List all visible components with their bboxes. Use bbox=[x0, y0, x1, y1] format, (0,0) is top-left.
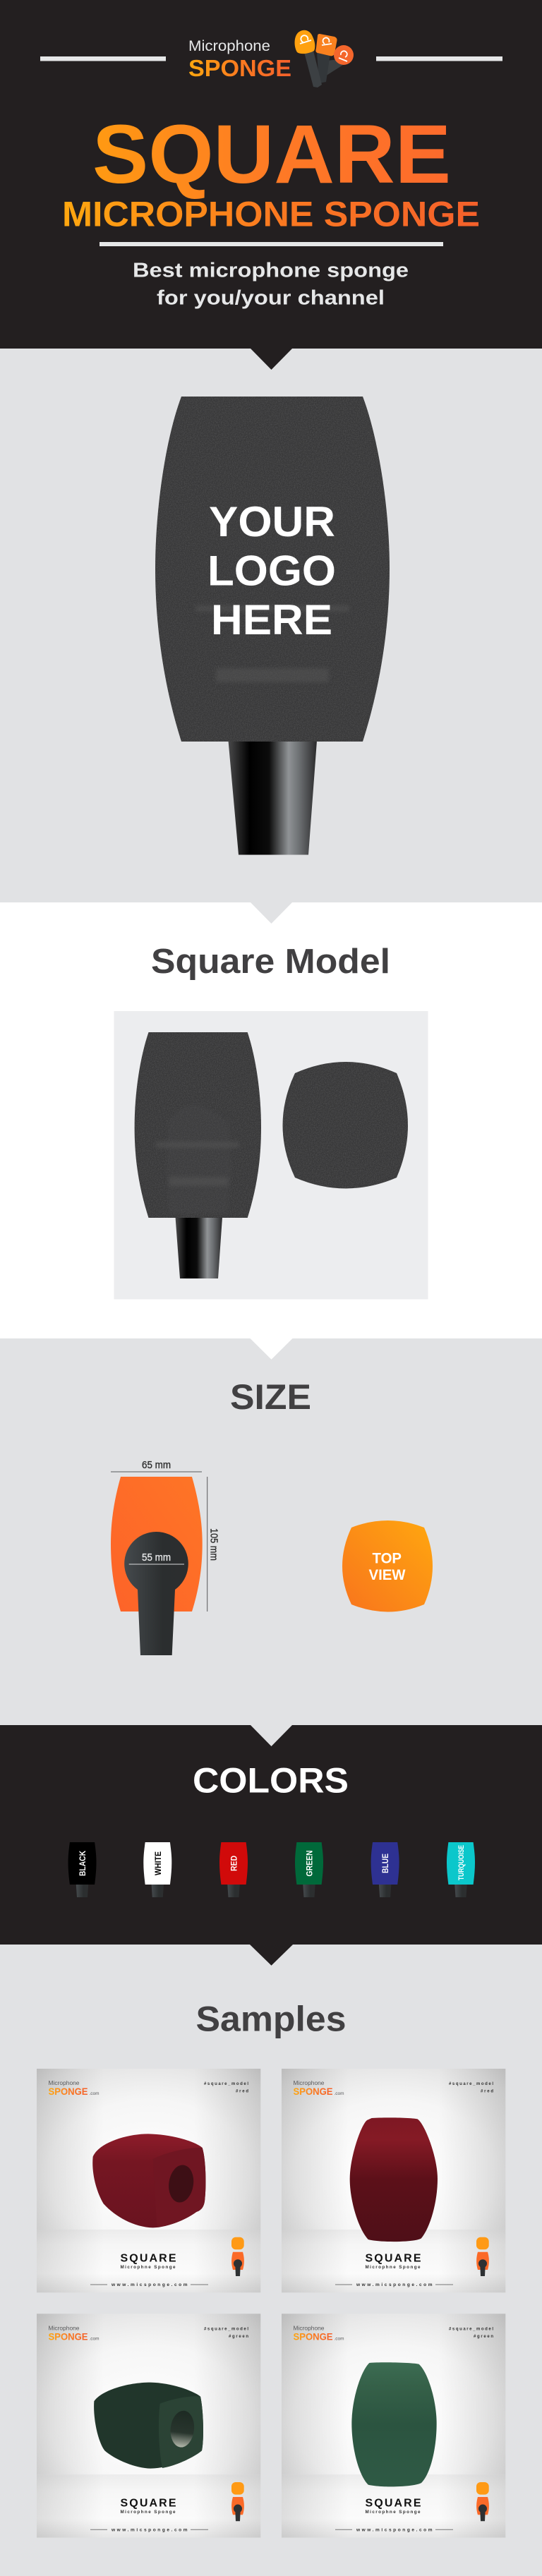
arrow: colors notch bbox=[250, 1945, 293, 1966]
swatch: red: RED bbox=[229, 1856, 239, 1871]
mini icon bbox=[476, 2482, 489, 2521]
tagline line one: Best microphone sponge bbox=[133, 260, 409, 282]
card subtitle: Microphne Sponge bbox=[366, 2265, 421, 2270]
mini icon bbox=[231, 2237, 244, 2276]
YOUR: YOUR bbox=[209, 498, 335, 545]
swatch: white bbox=[143, 1842, 171, 1897]
product photo: red sponge angled bbox=[92, 2134, 205, 2227]
hashtags: #red bbox=[236, 2090, 248, 2094]
hashtags bbox=[204, 2082, 248, 2094]
hashtags: #square_model bbox=[449, 2327, 493, 2331]
arrow: section notch bbox=[250, 1338, 293, 1360]
product photo: green sponge angled bbox=[94, 2383, 203, 2469]
sponge faint band upper bbox=[195, 605, 349, 612]
logo word SPONGE: SPONGE bbox=[188, 55, 291, 81]
heading SIZE: SIZE bbox=[230, 1377, 311, 1417]
swatch: green: GREEN bbox=[305, 1850, 315, 1877]
band lower bbox=[169, 1177, 229, 1186]
top view sponge bbox=[282, 1062, 408, 1188]
hashtags bbox=[449, 2082, 493, 2094]
card logo: Microphone bbox=[48, 2079, 80, 2086]
card logo: SPONGE bbox=[294, 2086, 333, 2097]
sponge side view bbox=[135, 1032, 261, 1218]
hashtags bbox=[449, 2327, 493, 2339]
card logo: .com bbox=[335, 2336, 344, 2341]
swatch: turquoise: TURQUOISE bbox=[457, 1845, 466, 1880]
card website: www.micsponge.com bbox=[111, 2527, 188, 2532]
swatch: red bbox=[219, 1842, 248, 1897]
arrow: section notch bbox=[251, 902, 292, 924]
sponge body bbox=[155, 397, 390, 742]
microphone handle bbox=[229, 741, 317, 855]
mini icon bbox=[231, 2482, 244, 2521]
card title: SQUARE bbox=[120, 2498, 176, 2510]
card title: SQUARE bbox=[366, 2498, 421, 2510]
tagline bbox=[133, 260, 409, 309]
card logo: Microphone bbox=[48, 2324, 80, 2331]
arrow: section notch bbox=[251, 1725, 292, 1746]
card logo: SPONGE bbox=[294, 2330, 333, 2342]
card logo: .com bbox=[335, 2091, 344, 2096]
panel: hero product bbox=[155, 397, 390, 855]
panel: square model bbox=[0, 902, 542, 1338]
HERE: HERE bbox=[211, 596, 332, 643]
card logo bbox=[48, 2079, 99, 2097]
title SQUARE: SQUARE bbox=[92, 108, 451, 201]
band upper bbox=[156, 1142, 239, 1148]
logo placeholder text bbox=[207, 498, 336, 643]
card logo bbox=[48, 2324, 99, 2342]
sponge faint band lower bbox=[216, 668, 329, 682]
card logo: .com bbox=[89, 2336, 99, 2341]
width arrow bbox=[111, 1471, 202, 1473]
swatch: blue bbox=[371, 1842, 399, 1897]
size diagram bbox=[111, 1460, 219, 1655]
LOGO: LOGO bbox=[207, 548, 336, 594]
card logo: .com bbox=[89, 2091, 99, 2096]
heading Square Model: Square Model bbox=[151, 942, 390, 981]
handle bbox=[175, 1217, 222, 1278]
height label: 105 mm bbox=[207, 1528, 219, 1561]
swatch: black: BLACK bbox=[78, 1851, 88, 1876]
swatch: turquoise bbox=[447, 1842, 475, 1897]
card logo: Microphone bbox=[294, 2324, 325, 2331]
card website: www.micsponge.com bbox=[356, 2282, 433, 2287]
mini icon bbox=[476, 2237, 489, 2276]
sample card: green front view bbox=[282, 2314, 505, 2538]
grille dome bbox=[167, 1104, 231, 1214]
panel: header bbox=[0, 0, 542, 349]
hashtags: #green bbox=[474, 2335, 493, 2339]
heading Samples: Samples bbox=[196, 1999, 346, 2039]
sponge outline bbox=[111, 1477, 203, 1611]
panel: size bbox=[111, 1338, 433, 1655]
sample card: red front view bbox=[282, 2069, 505, 2292]
microphone silhouette bbox=[124, 1532, 188, 1655]
hashtags: #green bbox=[229, 2335, 248, 2339]
width label: 65 mm bbox=[142, 1460, 171, 1471]
swatch: white: WHITE bbox=[153, 1851, 163, 1875]
sample card: red side view bbox=[37, 2069, 260, 2292]
product photo: red sponge front bbox=[350, 2117, 438, 2242]
VIEW: VIEW bbox=[368, 1567, 406, 1583]
logo word Microphone: Microphone bbox=[188, 38, 270, 54]
subtitle MICROPHONE SPONGE: MICROPHONE SPONGE bbox=[62, 193, 480, 234]
top view badge bbox=[342, 1520, 433, 1611]
hashtags: #red bbox=[481, 2090, 493, 2094]
brand logo bbox=[188, 30, 354, 87]
hashtags: #square_model bbox=[204, 2082, 248, 2086]
diameter label: 55 mm bbox=[142, 1552, 171, 1564]
header rule left bbox=[40, 56, 166, 61]
hashtags: #square_model bbox=[449, 2082, 493, 2086]
tagline line two: for you/your channel bbox=[157, 286, 385, 309]
divider bbox=[100, 242, 443, 246]
hashtags: #square_model bbox=[204, 2327, 248, 2331]
side view microphone bbox=[135, 1032, 261, 1278]
TOP: TOP bbox=[373, 1551, 402, 1566]
swatch: green bbox=[295, 1842, 323, 1897]
card logo bbox=[294, 2079, 344, 2097]
header rule right bbox=[376, 56, 502, 61]
swatch: black bbox=[68, 1842, 96, 1897]
card website: www.micsponge.com bbox=[356, 2527, 433, 2532]
card subtitle: Microphne Sponge bbox=[120, 2510, 176, 2515]
height arrow bbox=[207, 1477, 208, 1611]
card subtitle: Microphne Sponge bbox=[366, 2510, 421, 2515]
panel: colors bbox=[0, 1725, 542, 1945]
swatch: blue: BLUE bbox=[380, 1854, 390, 1873]
heading COLORS: COLORS bbox=[193, 1760, 349, 1801]
diameter arrow bbox=[129, 1564, 184, 1565]
card subtitle: Microphne Sponge bbox=[120, 2265, 176, 2270]
card logo: Microphone bbox=[294, 2079, 325, 2086]
card website: www.micsponge.com bbox=[111, 2282, 188, 2287]
product photo: green sponge front bbox=[351, 2362, 437, 2486]
card logo bbox=[294, 2324, 344, 2342]
card title: SQUARE bbox=[366, 2252, 421, 2264]
hashtags bbox=[204, 2327, 248, 2339]
image panel bbox=[114, 1011, 428, 1300]
card logo: SPONGE bbox=[48, 2086, 88, 2097]
card logo: SPONGE bbox=[48, 2330, 88, 2342]
icon: three microphones bbox=[295, 30, 354, 87]
arrow: header notch bbox=[251, 349, 292, 370]
sample card: green side view bbox=[37, 2314, 260, 2538]
card title: SQUARE bbox=[120, 2252, 176, 2264]
